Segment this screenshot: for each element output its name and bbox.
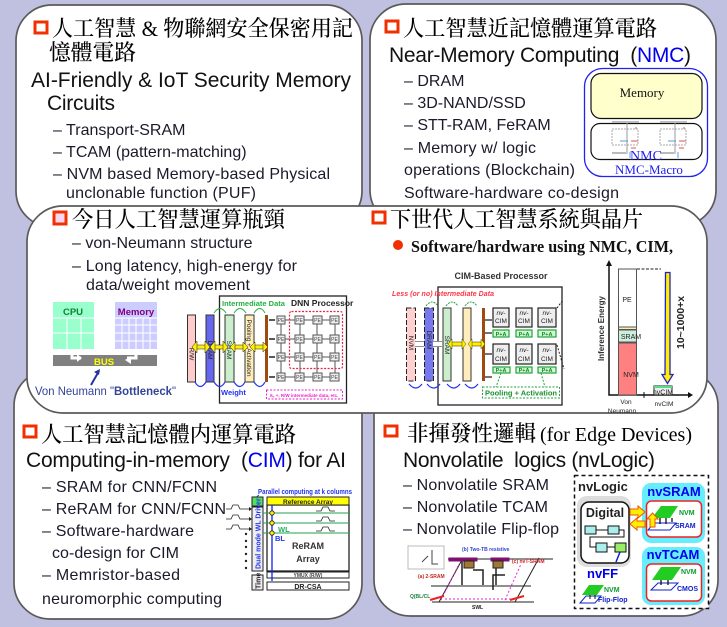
nvSRAM block: nvSRAM [647, 484, 701, 499]
diagram: DNN processor: PE [314, 337, 321, 343]
nvTCAM block: NVM [681, 569, 697, 576]
diagram: CIM-based processor: SRAM [443, 336, 450, 354]
schematic: nonvolatile SRAM cell: (a) 2-SRAM [418, 574, 445, 580]
panel: near-memory computing [370, 4, 716, 226]
list: NMC technologies: – STT-RAM, FeRAM [404, 117, 551, 134]
heading: bottleneck: 今日人工智慧運算瓶頸 [72, 207, 286, 232]
chart: inference energy: SRAM [621, 334, 641, 341]
list: CIM topics: – Memristor-based [42, 567, 180, 584]
diagram: CIM-based processor: Pooling + Activation [485, 388, 557, 398]
chart: inference energy [597, 260, 693, 415]
diagram: DNN processor: SRAM [225, 341, 232, 359]
digital block: Digital [586, 506, 624, 520]
list: memory types: – Transport-SRAM [53, 122, 185, 139]
diagram: ReRAM array: ReRAM [292, 541, 324, 551]
diagram: CIM-based processor: CIM [518, 318, 530, 325]
diagram: CIM-based processor: P+A [496, 332, 506, 338]
diagram: CIM-based processor: CIM [518, 356, 530, 363]
diagram: CIM-based processor: CIM [541, 318, 553, 325]
diagram: Von Neumann bottleneck: BUS [94, 357, 114, 368]
heading second line English: Circuits [47, 92, 115, 115]
diagram: DNN processor: PE [278, 375, 285, 381]
diagram: CIM-based processor: nv- [496, 347, 506, 354]
panel: computing-in-memory [14, 370, 362, 619]
list: CIM topics [42, 479, 226, 608]
diagram: Von Neumann bottleneck [35, 302, 176, 398]
schematic: nonvolatile SRAM cell: SWL [472, 605, 483, 611]
diagram: CIM-based processor: CIM [495, 318, 507, 325]
diagram: ReRAM array: Dual mode WL Driver [256, 498, 262, 569]
diagram: DNN processor: Xᵢ, +, R/W intermediate data, etc. [270, 393, 338, 398]
diagram: Von Neumann bottleneck: Memory [118, 307, 155, 318]
icon: red square bullet [35, 22, 47, 33]
nvFF block [580, 566, 628, 604]
list: NMC technologies: – 3D-NAND/SSD [404, 95, 526, 112]
diagram: CIM-based processor: P+A [542, 332, 552, 338]
diagram: DNN processor: Intermediate Data [222, 299, 286, 308]
heading: edge devices: (for Edge Devices) [540, 424, 692, 446]
nvTCAM block: CMOS [677, 586, 698, 593]
heading: next generation: 下世代人工智慧系統與晶片 [390, 207, 643, 232]
diagram: DNN processor: PE [278, 355, 285, 361]
nvLogic label: nvLogic [578, 479, 628, 494]
diagram: DNN processor: PE [331, 355, 338, 361]
text: next-gen bullet: Software/hardware using NMC, CIM, [411, 237, 673, 256]
diagram: DNN processor: PE [331, 318, 338, 324]
heading: CIM Chinese: 人工智慧記憶體内運算電路 [41, 422, 296, 447]
diagram: CIM-based processor: CIM-Based Processor [454, 271, 548, 281]
diagram: CIM-based processor: nv- [542, 347, 552, 354]
diagram: ReRAM array: Array [296, 554, 320, 564]
list: NMC technologies: operations (Blockchain) [404, 162, 575, 179]
diagram: ReRAM array: YMUX (R/W) [294, 573, 323, 579]
list: nonvolatile items: – Nonvolatile TCAM [403, 499, 548, 516]
list: nonvolatile items: – Nonvolatile Flip-flop [403, 521, 559, 538]
diagram: DNN processor [188, 296, 354, 403]
diagram: DNN processor: PE [331, 375, 338, 381]
diagram: Von Neumann bottleneck: Von Neumann "Bottleneck" [35, 384, 176, 398]
list: memory types: unclonable function (PUF) [66, 185, 256, 202]
diagram: CIM-based processor: P+A [519, 332, 529, 338]
diagram: CIM-based processor: P+A [519, 368, 529, 374]
diagram: ReRAM array: Time [256, 573, 262, 589]
diagram: CIM-based processor: DRAM [425, 330, 432, 350]
NMC-Macro label: NMC-Macro [615, 162, 683, 177]
nvSRAM block: NVM [679, 510, 695, 517]
diagram: NMC macro [584, 68, 708, 177]
diagram: DNN processor: R/W [188, 348, 194, 361]
heading: nvLogic Chinese: 非揮發性邏輯 [407, 421, 536, 446]
diagram: DNN processor: PE [296, 355, 303, 361]
chart: inference energy: Inference Energy [597, 296, 606, 361]
diagram: nvLogic block [574, 476, 708, 608]
list: NMC technologies: Software-hardware co-design [404, 185, 619, 202]
panel: AI computing bottleneck and next generation [27, 206, 707, 415]
NMC label: NMC [630, 149, 662, 164]
chart: inference energy: Von [620, 399, 632, 406]
list: NMC technologies [404, 73, 619, 202]
list: CIM topics: – SRAM for CNN/FCNN [42, 479, 217, 496]
schematic: nonvolatile SRAM cell: (c) nvT-SRAM [512, 559, 544, 565]
diagram: ReRAM array [226, 487, 352, 591]
diagram: ReRAM array: BL [275, 534, 285, 543]
list: nonvolatile items: – Nonvolatile SRAM [403, 477, 549, 494]
diagram: CIM-based processor: P+A [496, 368, 506, 374]
list: CIM topics: co-design for CIM [52, 545, 179, 562]
diagram: DNN processor: PE [314, 318, 321, 324]
diagram: CIM-based processor: CIM [541, 356, 553, 363]
nvFF block: nvFF [587, 566, 618, 581]
diagram: DNN processor: PE [296, 337, 303, 343]
chart: inference energy: nvCIM [655, 401, 673, 408]
heading: near-memory Chinese: 人工智慧近記憶體運算電路 [403, 16, 657, 41]
diagram: CIM-based processor: nv- [519, 347, 529, 354]
nvTCAM block: nvTCAM [647, 547, 699, 562]
schematic: nonvolatile SRAM cell: (b) Two-TB resistive [462, 547, 510, 553]
diagram: CIM-based processor: CIM [495, 356, 507, 363]
diagram: ReRAM array: Parallel computing at k columns [258, 487, 352, 496]
list: bottleneck causes [72, 235, 298, 294]
diagram: CIM-based processor [392, 271, 564, 405]
diagram: DNN processor: PE [296, 375, 303, 381]
memory label: Memory [620, 85, 665, 100]
icon: red square bullet [385, 426, 397, 436]
list: bottleneck causes: data/weight movement [86, 277, 251, 294]
schematic: nonvolatile SRAM cell: Q(BL/CL [410, 594, 430, 600]
list: memory types: – NVM based Memory-based Physical [53, 166, 330, 183]
memory block [591, 74, 702, 118]
list: memory types [53, 122, 330, 202]
diagram: CIM-based processor: nv- [542, 310, 552, 317]
panel: non-volatile logic [374, 370, 718, 616]
nvFF block: NVM [604, 587, 620, 594]
schematic: nonvolatile SRAM cell [408, 546, 553, 611]
list: bottleneck causes: – von-Neumann structure [72, 235, 253, 252]
diagram: DNN processor: PE [278, 337, 285, 343]
diagram: CIM-based processor: Less (or no) Intermediate Data [392, 291, 494, 298]
chart: inference energy: 10~1000+x [675, 296, 687, 349]
list: nonvolatile items [403, 477, 559, 538]
diagram: DNN processor: PE [278, 318, 285, 324]
list: memory types: – TCAM (pattern-matching) [53, 144, 247, 161]
heading: AI-Friendly English: AI-Friendly & IoT Security Memory [31, 69, 352, 92]
chart: inference energy: PE [622, 297, 632, 304]
diagram: DNN processor: PE [314, 375, 321, 381]
list: CIM topics: neuromorphic computing [42, 591, 222, 608]
icon: red square bullet [386, 21, 398, 32]
NMC block [591, 124, 702, 160]
chart: inference energy: NVM [623, 372, 639, 379]
heading second line: 憶體電路 [49, 40, 136, 65]
diagram: CIM-based processor: P+A [542, 368, 552, 374]
diagram: ReRAM array: Reference Array [283, 499, 333, 506]
diagram: DNN processor: PE [314, 355, 321, 361]
red bullet [393, 240, 403, 250]
heading: near-memory English: Near-Memory Computing (NMC) [389, 44, 691, 67]
heading: memory circuits Chinese: 人工智慧 & 物聯網安全保密用記 [52, 16, 353, 41]
nvTCAM block [642, 547, 705, 605]
diagram: CIM-based processor: NVM [407, 336, 414, 350]
diagram: ReRAM array: DR-CSA [294, 584, 322, 591]
diagram: Von Neumann bottleneck: CPU [63, 307, 83, 318]
diagram: CIM-based processor: nv- [496, 310, 506, 317]
chart: inference energy: nvCIM [653, 390, 673, 396]
panel: AI-friendly and IoT security memory circuits [16, 5, 362, 227]
heading: nvLogic English: Nonvolatile logics (nvLogic) [403, 449, 655, 472]
icon: red square bullet [24, 426, 36, 437]
icon: red square bullet [54, 212, 66, 224]
chart: inference energy: Neumann [608, 408, 636, 415]
list: CIM topics: – ReRAM for CNN/FCNN [42, 501, 226, 518]
list: NMC technologies: – Memory w/ logic [404, 140, 536, 157]
diagram: DNN processor: DRAM [206, 340, 213, 360]
diagram: ReRAM array: WL [278, 525, 290, 534]
list: CIM topics: – Software-hardware [42, 523, 194, 540]
nvFF block: Flip-Flop [598, 597, 628, 604]
nvSRAM block: SRAM [675, 523, 696, 530]
list: NMC technologies: – DRAM [404, 73, 464, 90]
small NMC schematics [612, 122, 687, 158]
diagram: DNN processor: Pooling + Activation [245, 320, 252, 377]
diagram: CIM-based processor: nv- [519, 310, 529, 317]
icon: red square bullet [373, 212, 385, 223]
list: bottleneck causes: – Long latency, high-energy for [72, 258, 298, 275]
diagram: DNN processor: Weight [221, 388, 246, 397]
nvSRAM block [630, 483, 705, 543]
diagram: DNN processor: DNN Processor [291, 298, 354, 308]
heading: CIM English: Computing-in-memory (CIM) for AI [26, 449, 346, 472]
diagram: DNN processor: PE [331, 337, 338, 343]
diagram: DNN processor: PE [296, 318, 303, 324]
